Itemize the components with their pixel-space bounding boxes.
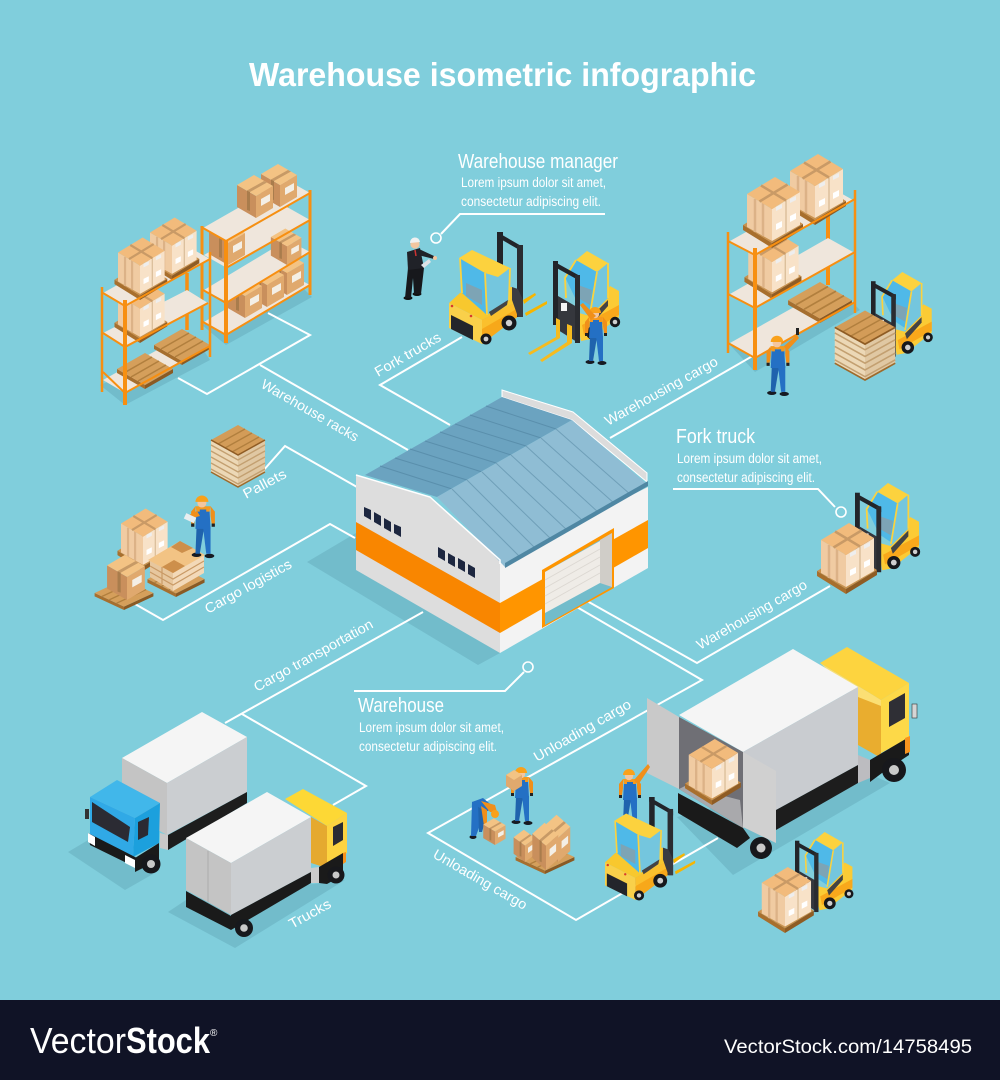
unloading workers [470, 764, 650, 845]
rack: top-right unit with boxes [728, 154, 855, 370]
forklift: unloading [605, 797, 695, 900]
callout: warehouse manager: Warehouse manager [458, 151, 618, 173]
carton being lifted [483, 818, 506, 845]
callout: warehouse [358, 695, 504, 754]
loading door [542, 528, 614, 628]
pallets pile [211, 425, 265, 487]
callout: warehouse manager: consectetur adipiscing elit. [461, 194, 601, 209]
connector labels: Fork trucks [372, 329, 444, 380]
connector lines [135, 214, 835, 920]
forklift: side view [449, 232, 547, 344]
callout: fork truck [676, 426, 822, 485]
bending worker [470, 798, 499, 839]
callout markers [431, 233, 846, 672]
windows [364, 507, 475, 578]
connector labels: Warehouse racks [258, 376, 362, 445]
worker waving [619, 764, 650, 827]
connector labels [202, 329, 810, 932]
callout: warehouse: Warehouse [358, 695, 444, 717]
footer bar [0, 1000, 1000, 1080]
footer logo: Vector [30, 1020, 126, 1061]
callout: warehouse manager: Lorem ipsum dolor sit amet, [461, 175, 606, 190]
connector labels: Unloading cargo [430, 846, 530, 913]
cartons on pallet: unloading [514, 815, 574, 874]
manager figure [404, 237, 437, 300]
worker at top-right rack [767, 328, 799, 396]
left wall [356, 475, 500, 653]
callout: fork truck: consectetur adipiscing elit. [677, 470, 815, 485]
ground shadows [68, 285, 890, 948]
connector labels: Cargo transportation [251, 616, 376, 695]
forklift: front view with worker [528, 251, 620, 365]
rack: top-left right-hand unit [202, 164, 310, 343]
footer logo: ® [210, 1028, 218, 1039]
pallet stack at top-right rack [835, 311, 895, 380]
big unloading truck [647, 647, 917, 859]
connector labels: Unloading cargo [530, 696, 634, 765]
footer logo [30, 1020, 218, 1061]
yellow truck [186, 789, 347, 937]
connector labels: Warehousing cargo [602, 353, 721, 429]
connector labels: Trucks [286, 895, 334, 932]
connector labels: Warehousing cargo [694, 576, 810, 653]
callout: warehouse: consectetur adipiscing elit. [359, 739, 497, 754]
callout: fork truck: Lorem ipsum dolor sit amet, [677, 451, 822, 466]
rack: top-left left-hand unit [102, 218, 210, 405]
orange band [356, 520, 648, 633]
forklift with load: fork truck panel [817, 483, 920, 594]
callout: fork truck: Fork truck [676, 426, 756, 448]
right wall [500, 487, 648, 653]
worker carrying a box [506, 767, 533, 825]
title: Warehouse isometric infographic [249, 56, 756, 93]
cargo logistics group [95, 495, 215, 610]
forklift at top-right rack [871, 272, 933, 357]
callout: warehouse: Lorem ipsum dolor sit amet, [359, 720, 504, 735]
forklift with load: lower right [758, 832, 853, 933]
connector labels: Pallets [240, 465, 289, 502]
blue truck [85, 712, 247, 874]
central warehouse building [356, 390, 648, 653]
connector labels: Cargo logistics [202, 556, 294, 617]
back roof [365, 397, 572, 497]
footer logo: Stock [126, 1020, 211, 1061]
callout: warehouse manager [458, 151, 618, 209]
rear parapet [502, 390, 647, 482]
front roof [437, 420, 648, 567]
footer url: VectorStock.com/14758495 [724, 1037, 972, 1058]
